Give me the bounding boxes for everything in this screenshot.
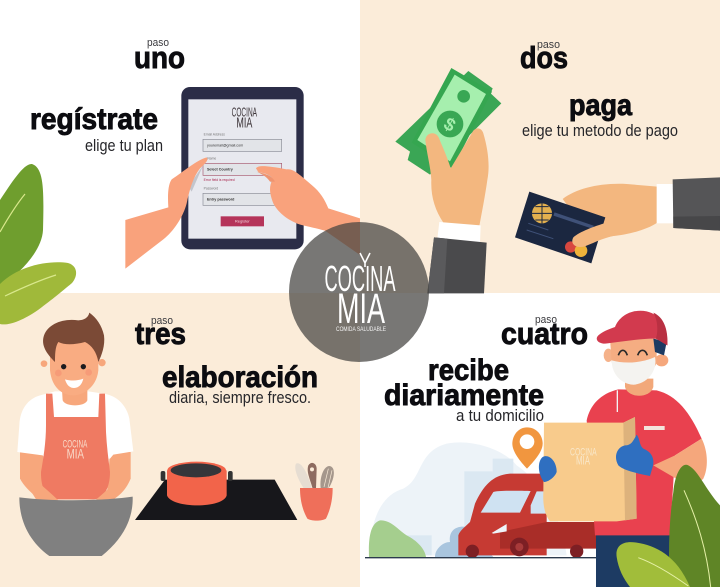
panel: paso dos illustration [395, 68, 720, 293]
text: paso tres: diaria, siempre fresco. [169, 389, 311, 407]
neck [625, 379, 653, 396]
icon: tablet: MIA [236, 116, 252, 132]
icon: right hand [256, 166, 360, 255]
eyes [618, 350, 647, 355]
icon: left hand [125, 157, 207, 269]
icon: foreground leaves [616, 465, 720, 587]
neck [62, 385, 87, 405]
icon: utensil cup [295, 463, 334, 521]
face [41, 360, 47, 367]
text: paso uno: uno [134, 40, 185, 75]
text: paso dos: paso [537, 39, 560, 51]
icon: green leaves top left [0, 164, 76, 324]
face [610, 339, 657, 374]
icon: mixing bowl [19, 497, 133, 556]
text: paso tres: elaboración [162, 361, 318, 394]
torso [587, 389, 702, 535]
eyes and smile [61, 364, 66, 369]
text: paso cuatro: diariamente [384, 379, 544, 412]
central logo badge: MIA [337, 285, 385, 333]
central logo badge [289, 222, 429, 362]
icon: tablet: Password [204, 187, 218, 191]
icon: tablet: Name [207, 157, 216, 161]
text: paso cuatro: recibe [428, 354, 509, 387]
hair [43, 313, 104, 362]
shirt [17, 391, 133, 459]
icon: pot [161, 462, 233, 505]
icon: right cuff and sleeve [657, 177, 720, 231]
panel: paso tres illustration [17, 313, 334, 556]
ears [604, 349, 613, 362]
icon: paper bag: COCINA [570, 446, 597, 458]
hair [653, 339, 667, 355]
icon: paper bag: MIA [576, 453, 590, 467]
icon: left cuff and sleeve [427, 222, 487, 293]
central logo badge: COCINA [324, 258, 396, 299]
arm [653, 439, 707, 489]
text: paso dos: elige tu metodo de pago [522, 122, 678, 140]
hands [28, 482, 58, 500]
icon: banknotes [395, 68, 501, 175]
text: paso uno [30, 37, 185, 155]
text: paso cuatro: cuatro [501, 316, 588, 351]
apron logo: COCINA [63, 439, 88, 451]
text: paso dos: paga [569, 89, 632, 122]
icon: paper bag [543, 417, 637, 521]
text: paso uno: paso [147, 37, 169, 49]
text: paso uno: regístrate [30, 103, 158, 136]
panel: paso cuatro illustration [365, 311, 720, 587]
mask [612, 357, 655, 385]
icon: cook: MIA [67, 446, 84, 462]
text: paso cuatro: a tu domicilio [456, 407, 544, 425]
icon: banknotes: $ [440, 113, 459, 136]
text: paso dos: dos [520, 40, 568, 75]
ground line [365, 556, 600, 560]
icon: tablet: Error field is required [204, 178, 235, 182]
icon: hand palm behind card [563, 184, 657, 240]
text: paso cuatro [384, 314, 588, 425]
cap [597, 311, 667, 345]
icon: thumb on card [572, 223, 618, 247]
icon: tablet: Entry password [207, 197, 234, 201]
trousers [596, 534, 672, 587]
icon: credit card [515, 192, 605, 263]
text: paso uno: elige tu plan [85, 137, 163, 155]
icon: cooktop [135, 480, 297, 520]
text: paso cuatro: paso [535, 314, 557, 326]
icon: tablet: Register [235, 218, 250, 223]
icon: gloves [539, 435, 653, 482]
icon: courier [587, 311, 707, 587]
icon: tablet: Email Address [204, 132, 225, 136]
icon: tablet: COCINA [232, 106, 257, 120]
icon: cook [17, 313, 133, 500]
apron [41, 394, 110, 499]
central logo badge: COMIDA SALUDABLE [336, 326, 386, 333]
text: paso tres: paso [151, 315, 173, 327]
icon: city backdrop [369, 442, 567, 557]
neck and arms [20, 452, 43, 499]
panel: paso uno illustration [125, 87, 360, 269]
icon: location pin [512, 427, 543, 469]
text: paso dos [520, 39, 678, 140]
icon: tablet [181, 87, 304, 249]
icon: tablet: Select Country [207, 167, 234, 171]
text: paso tres: tres [135, 316, 186, 351]
icon: delivery van [458, 474, 600, 558]
text: paso tres [135, 315, 318, 407]
icon: hand holding money [425, 128, 489, 226]
icon: tablet: youremail@gmail.com [207, 143, 243, 147]
